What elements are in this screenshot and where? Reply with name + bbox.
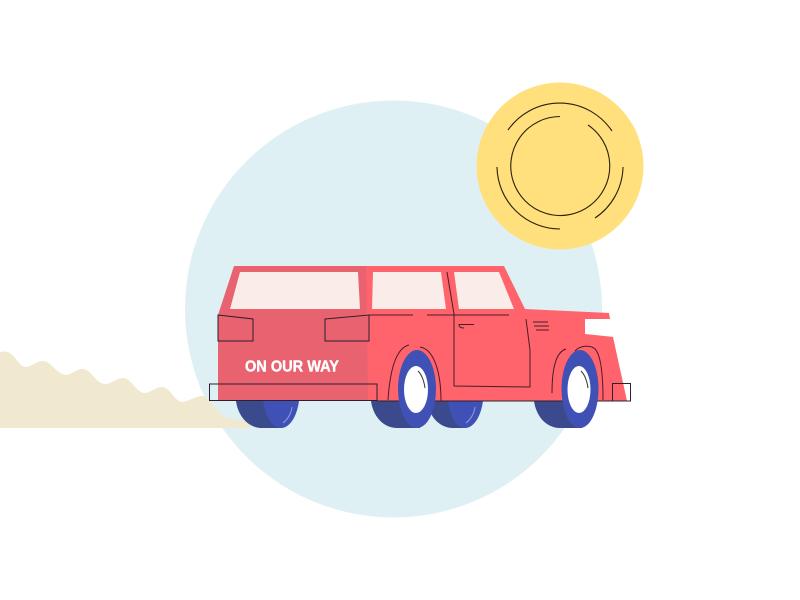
side panel	[366, 266, 627, 401]
caption on rear panel: ON OUR WAY	[245, 358, 339, 376]
wheels behind body	[236, 401, 582, 428]
door and trim lines	[369, 272, 603, 401]
front wheel right	[562, 350, 598, 428]
tail light right	[325, 315, 369, 341]
bottom sill line	[377, 400, 612, 402]
headlight	[585, 319, 614, 337]
side window middle	[372, 272, 446, 309]
rear panel	[218, 266, 368, 401]
sun	[476, 82, 644, 250]
front wheel middle	[398, 350, 436, 428]
background circle	[185, 100, 602, 518]
rear window	[230, 272, 360, 309]
side window front	[454, 272, 514, 309]
car body	[210, 266, 630, 401]
tail light left	[218, 315, 253, 341]
rear right wheel	[427, 401, 483, 428]
dust cloud	[0, 351, 250, 428]
rear left wheel	[236, 401, 299, 428]
front bumper outline	[612, 384, 630, 401]
front right wheel inner side	[534, 401, 582, 428]
rear bumper outline	[210, 384, 377, 400]
front wheel inner side	[371, 401, 420, 428]
